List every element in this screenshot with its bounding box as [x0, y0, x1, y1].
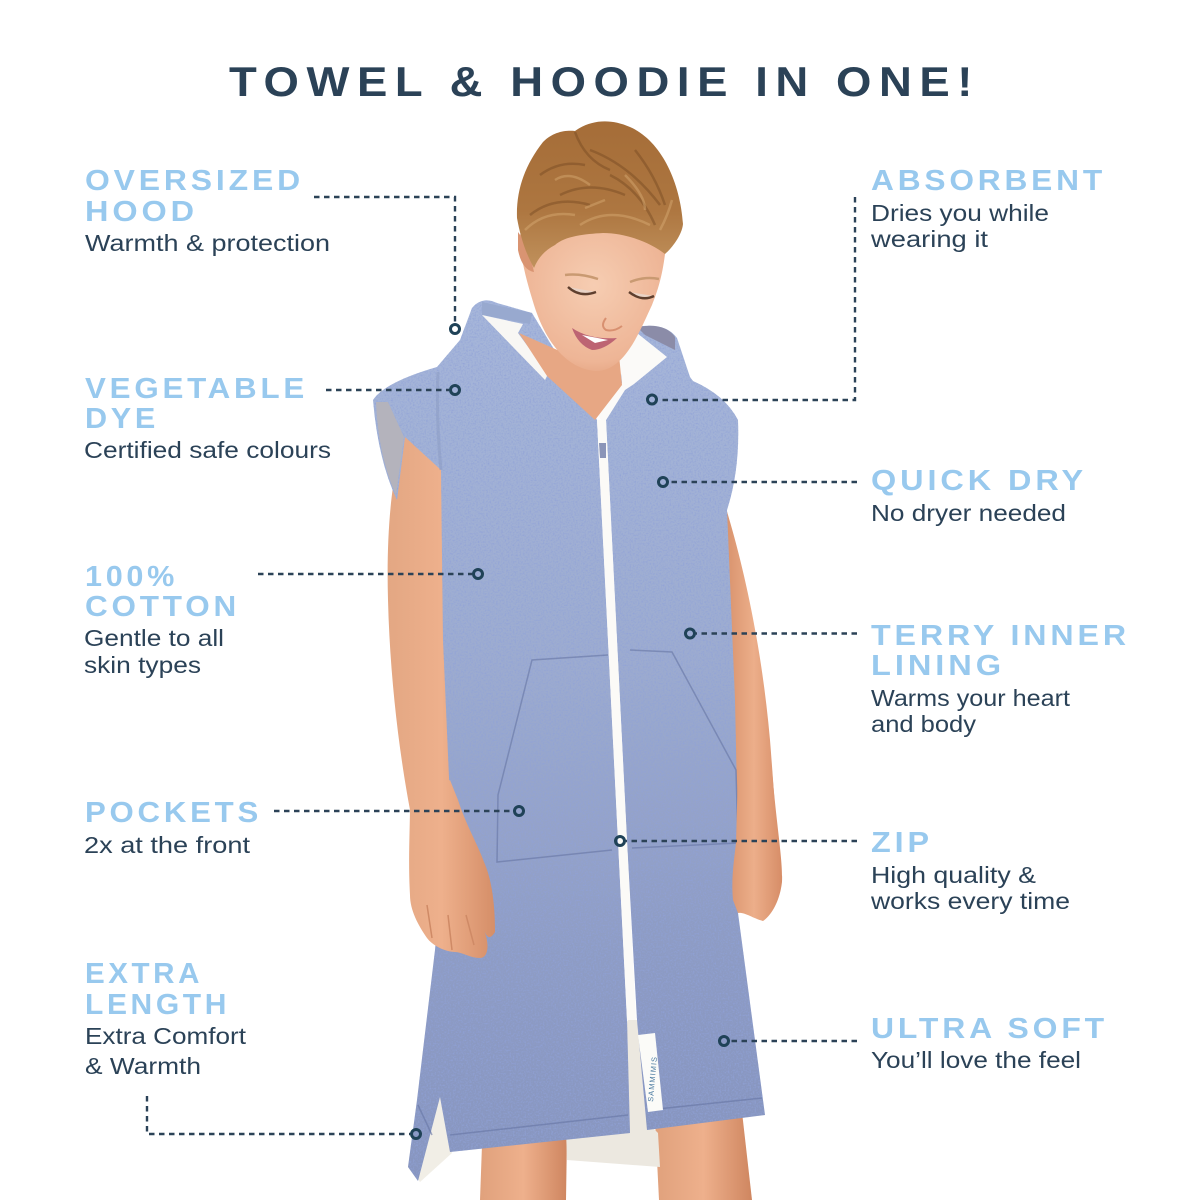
- hood gathered edge: [482, 302, 532, 324]
- callout: ultra soft: [720, 1013, 1108, 1073]
- callout: extra length: [85, 958, 420, 1138]
- callout: vegetable dye: VEGETABLE: [85, 373, 308, 405]
- callout: oversized hood: Warmth & protection: [85, 230, 330, 256]
- callout: zip: High quality &: [871, 862, 1036, 888]
- callout: terry inner lining: LINING: [871, 650, 1005, 682]
- eyes: [568, 287, 596, 294]
- callout: 100% cotton: Gentle to all: [84, 625, 224, 651]
- callout: zip: works every time: [870, 888, 1070, 914]
- callout: pockets: 2x at the front: [84, 832, 251, 858]
- illustration: boy wearing hooded towel: [373, 121, 782, 1200]
- upper right arm: [725, 505, 780, 860]
- callout: terry inner lining: TERRY INNER: [871, 620, 1130, 652]
- callout: quick dry: QUICK DRY: [871, 465, 1087, 497]
- callout: terry inner lining: Warms your heart: [871, 685, 1070, 711]
- callout: ultra soft: ULTRA SOFT: [871, 1013, 1108, 1045]
- callout: zip: ZIP: [871, 827, 933, 859]
- left leg: [480, 1135, 567, 1200]
- callout: 100% cotton: [84, 561, 482, 678]
- callout: extra length: EXTRA: [85, 958, 203, 990]
- callout: vegetable dye: Certified safe colours: [84, 437, 331, 463]
- hem stitching: [418, 1098, 762, 1135]
- sleeve inner lining: [376, 402, 404, 495]
- robe body right: [606, 326, 765, 1130]
- callout: absorbent: [648, 165, 1106, 404]
- callout: oversized hood: HOOD: [85, 196, 198, 228]
- shoulder seam shade: [437, 372, 441, 470]
- left hand and wrist: [409, 780, 495, 958]
- title: TOWEL & HOODIE IN ONE!: [229, 58, 980, 105]
- callout: zip: [616, 827, 1070, 914]
- callout: extra length: LENGTH: [85, 989, 230, 1021]
- hood lining right: [598, 333, 667, 425]
- finger lines: [427, 905, 474, 950]
- hood inner right: [637, 326, 675, 350]
- sewn label: SAMMIMIS: [646, 1056, 659, 1102]
- callout: oversized hood: OVERSIZED: [85, 165, 304, 197]
- callout: pockets: [84, 797, 524, 858]
- robe body left: [373, 300, 630, 1181]
- brows: [565, 274, 659, 282]
- ear: [518, 232, 534, 272]
- pockets: [497, 650, 738, 862]
- callout: extra length: & Warmth: [85, 1053, 201, 1079]
- right leg: [655, 1112, 752, 1200]
- callout: ultra soft: You’ll love the feel: [871, 1047, 1081, 1073]
- head: [520, 215, 668, 371]
- hair strands: [530, 132, 665, 225]
- neck: [519, 333, 622, 420]
- callout: terry inner lining: and body: [871, 711, 976, 737]
- callout: extra length: Extra Comfort: [85, 1023, 247, 1049]
- right hand and wrist: [732, 770, 782, 921]
- callout: quick dry: No dryer needed: [871, 500, 1066, 526]
- callout: pockets: POCKETS: [85, 797, 262, 829]
- nose shade: [603, 318, 622, 330]
- callout: absorbent: ABSORBENT: [871, 165, 1106, 197]
- callout: 100% cotton: COTTON: [85, 591, 240, 623]
- callout: 100% cotton: 100%: [85, 561, 178, 593]
- callout: oversized hood: [85, 165, 460, 334]
- callout: absorbent: wearing it: [870, 226, 989, 252]
- upper left arm: [388, 435, 470, 820]
- zip: [597, 420, 636, 1020]
- callout: absorbent: Dries you while: [871, 200, 1049, 226]
- callout: 100% cotton: skin types: [84, 652, 201, 678]
- terry lining at hem: [566, 1020, 660, 1167]
- mouth: [572, 328, 617, 350]
- callout: terry inner lining: [686, 620, 1130, 737]
- hair: [517, 121, 683, 268]
- callout: vegetable dye: DYE: [85, 403, 159, 435]
- sewn label: [638, 1033, 663, 1112]
- callout: vegetable dye: [84, 373, 460, 463]
- hood lining left: [482, 315, 548, 380]
- callout: quick dry: [658, 465, 1087, 526]
